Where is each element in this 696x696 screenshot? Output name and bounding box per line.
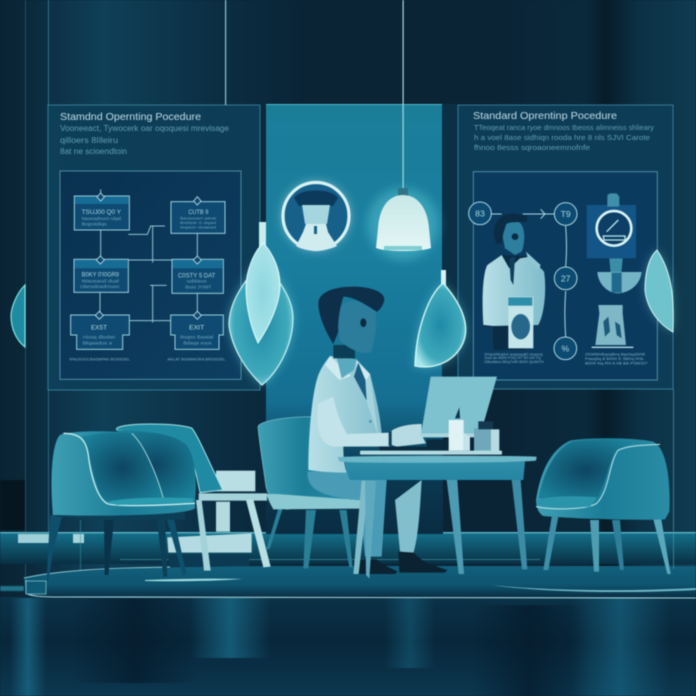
label: step 5 text: EXST: [91, 324, 107, 331]
desk items: [449, 420, 499, 451]
icon: round mirror portrait: [282, 182, 350, 250]
caption: right panel footers: Suei an 8000 POQ RT 59 UI9 TQ: [484, 356, 541, 360]
timeline marker 3: 27: [561, 273, 571, 283]
text block: left panel description: qilloers 8Illeiru: [60, 136, 118, 145]
caption: flowchart footers: [69, 357, 226, 362]
flow box: step 1: Bopotdiqs: [82, 221, 107, 226]
timeline marker 2: [554, 203, 577, 225]
label: step 6 text: Bdaqa xuus: [183, 341, 212, 346]
panel: right illustrated SOP: [458, 105, 673, 389]
text block: left panel description: Vooneeact, Tywocerk oar oqoquesi mrevisage: [60, 124, 230, 133]
round platform: [0, 566, 696, 598]
lab coat torso: [308, 356, 392, 473]
chair: front left: [47, 431, 195, 582]
label: step 5 text: Atosq dlaslan: [83, 335, 116, 340]
caption: right panel footers: DBodfanu 8Dq7o99 8000 Qu9A7H: [484, 360, 544, 364]
caption: right panel footers: 200AWnBqoqBnq 8qu0qq9008: [585, 353, 645, 357]
panel: centre backdrop: [266, 104, 458, 534]
heading: left panel title: Stamdnd Opernting Pocedure: [60, 111, 201, 123]
flow box: step 1: [74, 196, 129, 230]
flow box: step 4: C0STY 5 DAT: [178, 273, 216, 279]
timeline marker 4: %: [561, 343, 569, 353]
flow box: step 4: Buss JY99T: [185, 285, 212, 290]
caption: right panel footers: D0qudAbqAuI aoqeaqqlD duqunq: [484, 352, 543, 356]
flow box: step 2: Isqaon duaead: [180, 225, 216, 230]
desk and objects: [337, 377, 537, 578]
wall skirting band: [0, 520, 696, 570]
head and face: [318, 287, 384, 358]
flow box: step 1: TSUJ00 Q0 Y: [82, 209, 122, 216]
flow box: step 6: [171, 315, 223, 349]
text block: right panel description: TTeoqeat ranca ryoe dmnoos tbeoss alimneiss shlieary: [474, 123, 654, 132]
text block: right panel description: h a voel 8ase sidhiqn rooda hre 8 nls SJVI Carote: [474, 133, 650, 142]
panel: left flowchart SOP: [48, 105, 260, 390]
icon: left leaf pendant lamp: [229, 222, 293, 385]
label: step 5 text: [83, 324, 116, 346]
flow box: step 4: uddaus: [187, 279, 207, 284]
figure: man holding clipboard: [483, 213, 545, 350]
flow box: step 2: CUTB 9: [188, 209, 209, 216]
hand on keyboard: [392, 424, 426, 447]
chair behind man: [258, 417, 360, 568]
icon: white bell pendant lamp: [367, 0, 439, 260]
flow box: step 3: [74, 259, 128, 292]
flowchart frame: [60, 171, 241, 379]
flow box: step 2: Bansuuarn adnal: [180, 215, 216, 220]
timeline connector: [490, 209, 566, 337]
flow box: step 2: Bxtlsdr 0 dqad: [180, 220, 216, 225]
flow box: step 4: [172, 259, 223, 293]
desk: [337, 451, 537, 578]
label: step 6 text: EXIT: [189, 324, 204, 331]
left furniture group: [47, 424, 271, 582]
icon: centre teardrop pendant lamp: [415, 270, 466, 367]
flow box: step 3: Ulansdnadrnuen: [80, 284, 120, 289]
caption: right panel footers: 8009 Nq R9 A 08 8A P05D07: [585, 362, 648, 366]
caption: flowchart footers: AKLAT B0SBMORA BRSSI2EL: [167, 357, 226, 362]
caption: flowchart footers: IPAUSOOCBASMPAK BOSSI2EL: [69, 357, 131, 362]
icon: left pendant cable: [225, 0, 226, 105]
man at desk with chair: [258, 287, 447, 574]
flow box: step 5: [71, 315, 129, 349]
icon: specimen cylinder: [592, 305, 633, 348]
flow box: step 1: Naumadnuon rdqal: [82, 216, 121, 221]
label: step 6 text: Iloqso Baatal: [180, 335, 213, 340]
illustration frame: [473, 172, 657, 380]
far-right vertical line: [673, 389, 674, 569]
timeline marker 3: [554, 267, 577, 290]
text block: right panel description: fhnoo 8esss sqroaoneemnofnfe: [474, 143, 590, 152]
timeline marker 1: 83: [475, 208, 485, 218]
heading: right panel title: Standard Oprentinp Pocedure: [473, 110, 617, 122]
trousers and legs: [308, 470, 447, 574]
label: step 6 text: [180, 324, 213, 346]
side table: [167, 471, 271, 571]
flow box: step 3: B0KY 0'I0GR9: [82, 273, 120, 279]
flow box: step 2: [171, 202, 225, 233]
icon: ring gauge device: [587, 193, 642, 293]
chair: back left: [117, 424, 223, 500]
laptop: [379, 377, 497, 451]
text block: left panel description: 8at ne scioendtoin: [60, 147, 127, 156]
text block: left panel description: [60, 124, 230, 156]
caption: right panel footers: [484, 352, 648, 366]
icon: far-left half lamp: [11, 285, 25, 347]
floor with reflections: [0, 597, 696, 696]
label: step 5 text: Blqaadus a: [83, 341, 113, 346]
timeline marker 1: [469, 202, 491, 225]
right chair: [536, 438, 671, 574]
text block: right panel description: [474, 123, 654, 152]
timeline marker 4: [554, 337, 577, 360]
caption: right panel footers: Pasq5q 8 8000 E 58Dq R9L: [585, 357, 644, 361]
icon: far-right leaf lamp: [645, 250, 673, 332]
flow box: step 3: Wausaud dual: [82, 278, 119, 283]
timeline marker 2: T9: [561, 209, 571, 219]
